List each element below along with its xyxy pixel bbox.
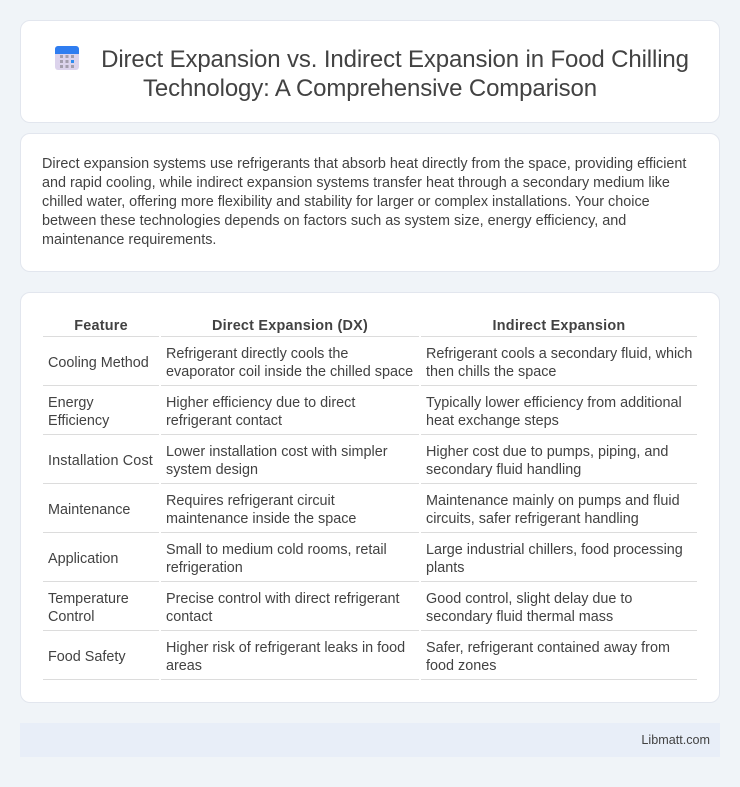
row: cooling method: then chills the space xyxy=(426,364,556,380)
row: maintenance xyxy=(48,493,680,527)
title xyxy=(101,46,689,102)
row: food safety: food zones xyxy=(426,658,496,674)
row: application: Large industrial chillers, food processing xyxy=(426,542,683,558)
row: maintenance: Maintenance xyxy=(48,502,130,518)
row: application: plants xyxy=(426,560,464,576)
row: installation cost: Higher cost due to pumps, piping, and xyxy=(426,444,668,460)
header row xyxy=(74,318,625,334)
row: energy efficiency: Typically lower efficiency from additional xyxy=(426,395,682,411)
row: maintenance: maintenance inside the space xyxy=(166,511,356,527)
row: cooling method: Refrigerant cools a secondary fluid, which xyxy=(426,346,692,362)
title: Technology: A Comprehensive Comparison xyxy=(143,75,597,102)
row: energy efficiency: Energy xyxy=(48,395,94,411)
row: application: Application xyxy=(48,551,118,567)
row: maintenance: Requires refrigerant circuit xyxy=(166,493,335,509)
row: temperature control: Temperature xyxy=(48,591,129,607)
intro text: Direct expansion systems use refrigerants that absorb heat directly from the space, providing efficient xyxy=(42,156,686,172)
row: food safety: areas xyxy=(166,658,202,674)
row: installation cost: Lower installation cost with simpler xyxy=(166,444,388,460)
header row: Direct Expansion (DX) xyxy=(212,318,368,334)
row: cooling method: evaporator coil inside the chilled space xyxy=(166,364,413,380)
row: energy efficiency: heat exchange steps xyxy=(426,413,559,429)
row: cooling method: Cooling Method xyxy=(48,355,149,371)
row: installation cost: secondary fluid handling xyxy=(426,462,581,478)
row: food safety: Food Safety xyxy=(48,649,126,665)
row: application: refrigeration xyxy=(166,560,243,576)
row: food safety xyxy=(48,640,670,674)
row: temperature control: Good control, slight delay due to xyxy=(426,591,632,607)
row: temperature control: secondary fluid thermal mass xyxy=(426,609,613,625)
row: installation cost: Installation Cost xyxy=(48,453,153,469)
header row: Feature xyxy=(74,318,128,334)
header card xyxy=(20,20,720,123)
row: temperature control: Control xyxy=(48,609,94,625)
intro text xyxy=(42,156,686,248)
table card xyxy=(20,292,720,703)
comparison table xyxy=(43,318,697,680)
row: installation cost xyxy=(48,444,668,478)
row: installation cost: system design xyxy=(166,462,258,478)
row: food safety: Safer, refrigerant contained away from xyxy=(426,640,670,656)
row: energy efficiency: Efficiency xyxy=(48,413,109,429)
intro text: maintenance requirements. xyxy=(42,232,216,248)
row: cooling method: Refrigerant directly cools the xyxy=(166,346,348,362)
intro text: between these technologies depends on factors such as system size, energy efficiency, and xyxy=(42,213,626,229)
row: application: Small to medium cold rooms, retail xyxy=(166,542,387,558)
header row: Indirect Expansion xyxy=(493,318,625,334)
row: food safety: Higher risk of refrigerant leaks in food xyxy=(166,640,405,656)
row: application xyxy=(48,542,683,576)
footer bar xyxy=(20,723,720,757)
row: maintenance: circuits, safer refrigerant handling xyxy=(426,511,639,527)
intro text: and rapid cooling, while indirect expansion systems transfer heat through a secondary medium like xyxy=(42,175,670,191)
row: maintenance: Maintenance mainly on pumps and fluid xyxy=(426,493,680,509)
row: temperature control: contact xyxy=(166,609,212,625)
row: temperature control: Precise control with direct refrigerant xyxy=(166,591,400,607)
row: energy efficiency: refrigerant contact xyxy=(166,413,282,429)
intro text: chilled water, offering more flexibility and stability for larger or complex installations. Your choice xyxy=(42,194,650,210)
row: temperature control xyxy=(48,591,632,625)
intro card xyxy=(20,133,720,272)
row: cooling method xyxy=(48,346,692,380)
row: energy efficiency: Higher efficiency due to direct xyxy=(166,395,355,411)
icon: calendar grid xyxy=(55,46,79,70)
footer credit: Libmatt.com xyxy=(641,733,710,747)
row: energy efficiency xyxy=(48,395,682,429)
title: Direct Expansion vs. Indirect Expansion in Food Chilling xyxy=(101,46,689,73)
